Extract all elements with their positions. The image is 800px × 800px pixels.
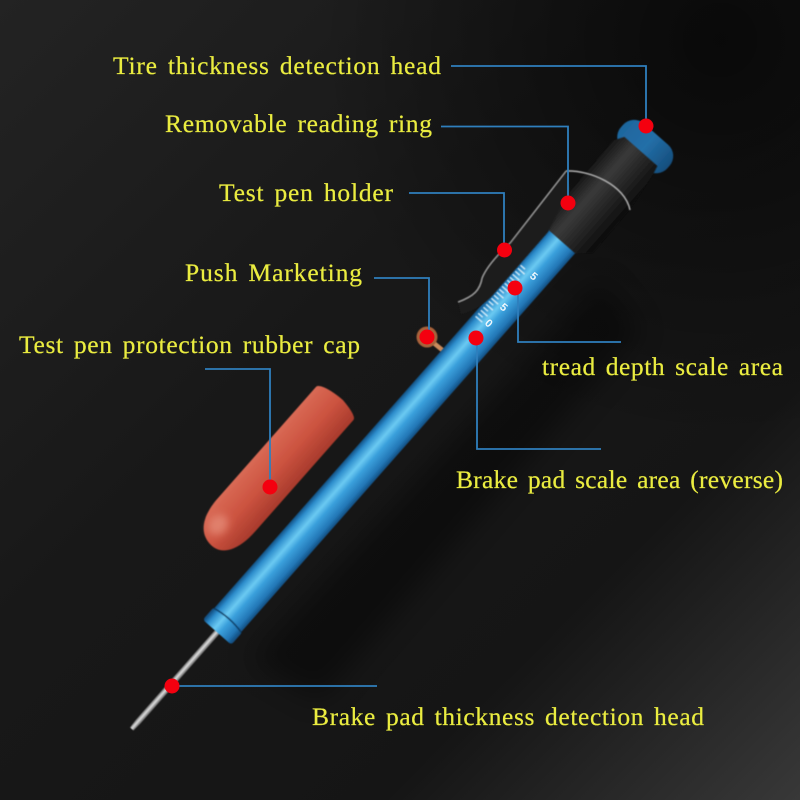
label: tire thickness detection head: Tire thickness detection head [113, 51, 441, 80]
label: removable reading ring: Removable reading ring [165, 109, 432, 138]
leader lines [172, 66, 646, 686]
pen: scale ticks and numbers: 5 [527, 270, 540, 283]
pen: push marketing pin [416, 326, 446, 353]
label: test pen holder: Test pen holder [219, 178, 394, 207]
pen: tire detection head [611, 114, 679, 179]
pen: scale ticks and numbers: 5 [497, 301, 510, 314]
pen: scale ticks and numbers: 0 [482, 317, 495, 330]
pen: black reading ring and holder [541, 133, 664, 262]
label: push marketing: Push Marketing [185, 258, 362, 287]
rubber protection cap [192, 381, 359, 561]
label: tread depth scale area: tread depth scale area [542, 352, 783, 381]
pen: needle [129, 624, 225, 731]
marker dots [164, 118, 654, 694]
label: brake pad scale area: Brake pad scale area (reverse) [456, 465, 783, 494]
pen: barrel [203, 227, 578, 645]
label: brake pad thickness detection head: Brake pad thickness detection head [312, 702, 704, 731]
pen clip [458, 171, 630, 314]
label: test pen protection rubber cap: Test pen protection rubber cap [19, 330, 360, 359]
pen: scale ticks and numbers [476, 265, 540, 330]
